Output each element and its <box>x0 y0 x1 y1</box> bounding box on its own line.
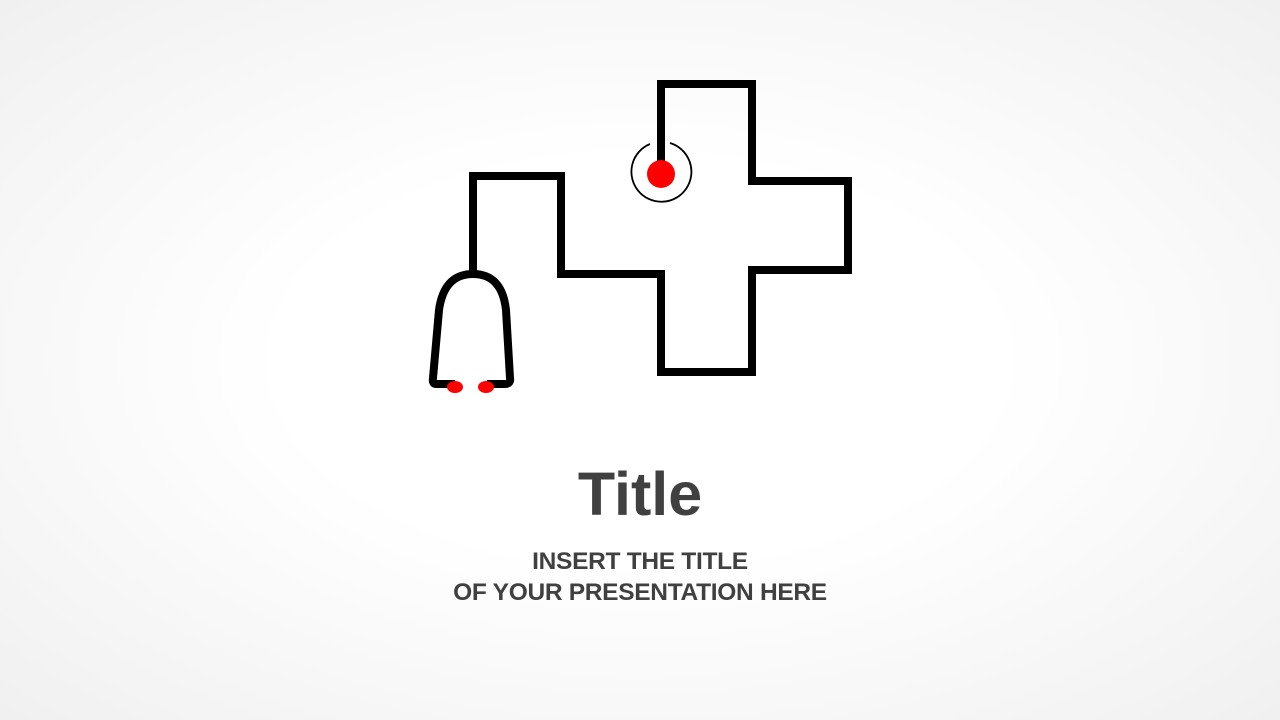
stethoscope earpieces <box>433 274 510 393</box>
subtitle <box>453 548 827 606</box>
title: Title <box>578 460 702 528</box>
chest piece <box>631 143 691 202</box>
cross tube path <box>473 84 848 372</box>
subtitle: OF YOUR PRESENTATION HERE <box>453 579 827 606</box>
subtitle: INSERT THE TITLE <box>532 548 748 575</box>
